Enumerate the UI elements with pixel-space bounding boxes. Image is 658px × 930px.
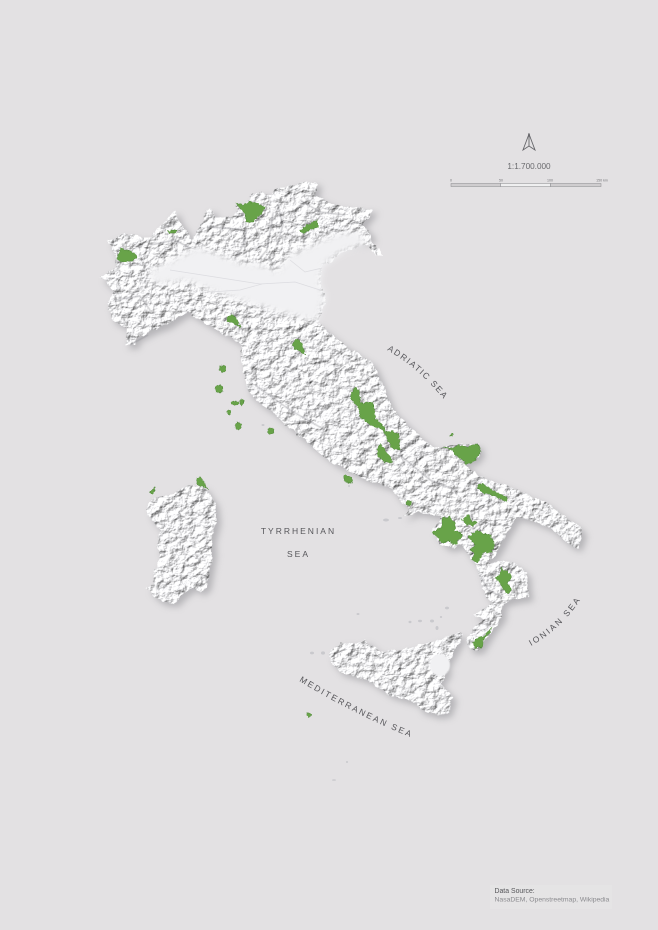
label: Tyrrhenian: TYRRHENIAN bbox=[261, 526, 336, 536]
Po river lines bbox=[170, 260, 322, 292]
scale bar: 150 km bbox=[596, 178, 608, 182]
label: Ionian Sea: IONIAN SEA bbox=[528, 599, 580, 646]
scale bar: 0 bbox=[450, 178, 452, 182]
protected areas: green polygons bbox=[117, 202, 512, 717]
park: Val Grande bbox=[167, 230, 177, 233]
label: Sea: SEA bbox=[287, 549, 310, 559]
park: Appennino Lucano bbox=[462, 515, 478, 525]
park: Asinara bbox=[150, 487, 155, 494]
small islands bbox=[262, 424, 449, 781]
map scale ratio: 1:1.700.000 bbox=[507, 162, 551, 171]
park: Abruzzo bbox=[377, 443, 392, 463]
scale bar: 100 bbox=[547, 178, 553, 182]
sea labels bbox=[261, 346, 580, 737]
data source panel: NasaDEM, Openstreetmap, Wikipedia bbox=[494, 896, 610, 904]
mainland relief bbox=[100, 181, 583, 650]
north arrow: N bbox=[528, 133, 531, 137]
north arrow bbox=[523, 133, 535, 150]
scale bar bbox=[450, 178, 608, 186]
Po plain bbox=[148, 231, 368, 322]
park: Dolomiti Bellunesi bbox=[299, 220, 318, 233]
park: Tremiti bbox=[451, 434, 453, 436]
label: Adriatic Sea: ADRIATIC SEA bbox=[387, 346, 446, 399]
park: Tosco-Emiliano bbox=[227, 314, 240, 327]
park: Vesuvius bbox=[406, 500, 412, 506]
park: Cilento bbox=[432, 517, 463, 545]
park: Sila bbox=[495, 568, 512, 594]
park: Circeo islands bbox=[342, 474, 354, 484]
park: Gargano bbox=[443, 443, 481, 465]
Etna bbox=[430, 654, 450, 676]
park: Pantelleria bbox=[307, 713, 311, 717]
park: Foreste Casentinesi bbox=[293, 339, 305, 355]
data source panel bbox=[490, 885, 612, 909]
park: Aspromonte bbox=[473, 627, 492, 648]
park: Gran Paradiso bbox=[117, 248, 137, 262]
label: Mediterranean Sea: MEDITERRANEAN SEA bbox=[300, 676, 410, 737]
scale bar: 50 bbox=[499, 178, 503, 182]
data source panel: Data Source: bbox=[494, 888, 535, 895]
cast shadows of the land bbox=[104, 185, 587, 719]
park: Stelvio bbox=[236, 202, 265, 222]
park: La Maddalena bbox=[196, 477, 208, 490]
Sardinia relief bbox=[147, 485, 217, 603]
park: Alta Murgia bbox=[478, 484, 507, 502]
river valleys bbox=[115, 200, 500, 596]
park: Pollino bbox=[468, 530, 495, 563]
park: Tuscan Archipelago bbox=[215, 366, 274, 434]
Sicily relief bbox=[330, 633, 463, 715]
park: Sibillini and Gran Sasso bbox=[350, 387, 400, 450]
